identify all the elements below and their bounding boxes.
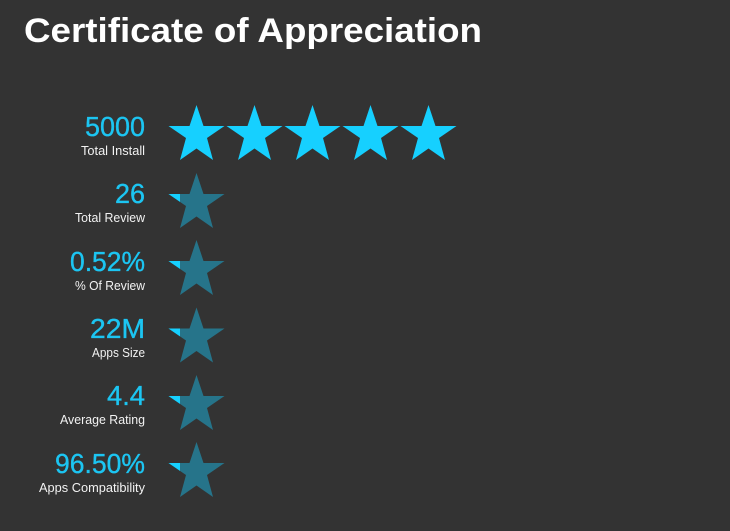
partially filled star xyxy=(168,442,224,497)
value: 0.52%: 0.52% xyxy=(70,246,145,277)
label: total review: Total Review xyxy=(75,211,146,225)
row: average rating xyxy=(60,375,224,430)
row: apps compatibility xyxy=(39,442,224,497)
partially filled star xyxy=(168,375,224,430)
label: total install: Total Install xyxy=(81,144,145,158)
label: percent of review: % Of Review xyxy=(75,279,146,293)
partially filled star xyxy=(168,308,224,362)
value: 26: 26 xyxy=(115,178,145,209)
partially filled star xyxy=(168,173,224,228)
five filled stars xyxy=(168,105,456,160)
row: percent of review xyxy=(70,240,224,295)
label: apps size: Apps Size xyxy=(92,346,145,360)
label: apps compatibility: Apps Compatibility xyxy=(39,481,146,495)
row: total install xyxy=(81,105,456,160)
row: apps size xyxy=(90,308,224,362)
value: 22M: 22M xyxy=(90,313,145,344)
title: Certificate of Appreciation xyxy=(24,12,482,50)
value: 4.4: 4.4 xyxy=(107,380,145,411)
label: average rating: Average Rating xyxy=(60,413,145,427)
value: 5000: 5000 xyxy=(85,111,145,142)
partially filled star xyxy=(168,240,224,295)
value: 96.50%: 96.50% xyxy=(55,448,145,479)
row: total review xyxy=(75,173,224,228)
